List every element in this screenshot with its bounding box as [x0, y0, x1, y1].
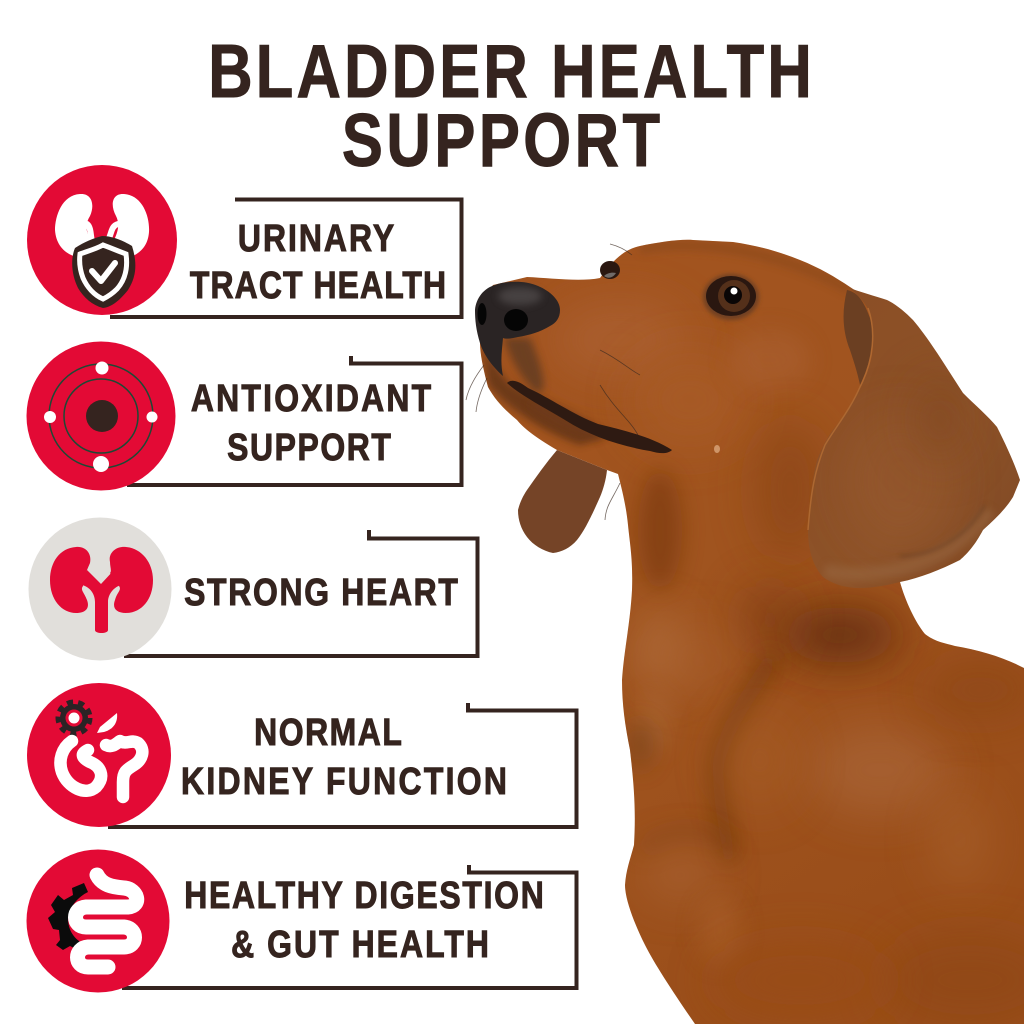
icon: antioxidant atom [26, 342, 176, 490]
label: antioxidant support: SUPPORT [227, 426, 391, 469]
label: normal kidney function: KIDNEY FUNCTION [181, 760, 507, 803]
title: SUPPORT [342, 98, 660, 182]
chest shading [718, 655, 775, 860]
icon: gear and intestine [27, 683, 171, 827]
label: healthy digestion: HEALTHY DIGESTION [184, 874, 544, 917]
label: healthy digestion: & GUT HEALTH [231, 923, 489, 966]
label: urinary tract health: TRACT HEALTH [190, 264, 446, 307]
icon: kidneys with shield [27, 165, 177, 315]
label: antioxidant support [191, 377, 432, 469]
label: urinary tract health [190, 217, 446, 307]
small ear [518, 450, 607, 553]
head shading [564, 306, 676, 374]
icon: kidneys on grey [28, 518, 172, 660]
label: normal kidney function [181, 711, 507, 803]
throat spot [714, 445, 720, 453]
panel: urinary tract health [27, 165, 462, 317]
title: BLADDER HEALTH [208, 29, 812, 113]
frame: strong heart [124, 530, 478, 656]
dog body and head [460, 230, 1024, 1024]
dog photo illustration [460, 230, 1024, 1024]
label: urinary tract health: URINARY [238, 217, 394, 260]
frame: urinary tract health [110, 200, 462, 317]
large ear [800, 280, 1024, 592]
label: normal kidney function: NORMAL [254, 711, 402, 754]
eye [703, 274, 759, 320]
label: antioxidant support: ANTIOXIDANT [191, 377, 432, 420]
mouth [507, 381, 672, 453]
frame: normal kidney function [108, 703, 576, 827]
panel: normal kidney function [27, 683, 576, 827]
panel: strong heart [28, 518, 478, 660]
frame: antioxidant support [127, 356, 462, 485]
panel: antioxidant support [26, 342, 462, 490]
far eye [600, 261, 620, 279]
frame: healthy digestion [122, 865, 576, 988]
panel: healthy digestion and gut health [26, 850, 576, 992]
nose [475, 282, 560, 376]
label: healthy digestion [184, 874, 544, 966]
label: strong heart: STRONG HEART [184, 571, 458, 614]
muzzle shading [482, 345, 610, 445]
icon: gear and gut [26, 850, 170, 992]
neck shading [638, 470, 682, 590]
whiskers [466, 244, 640, 520]
title [208, 29, 812, 182]
